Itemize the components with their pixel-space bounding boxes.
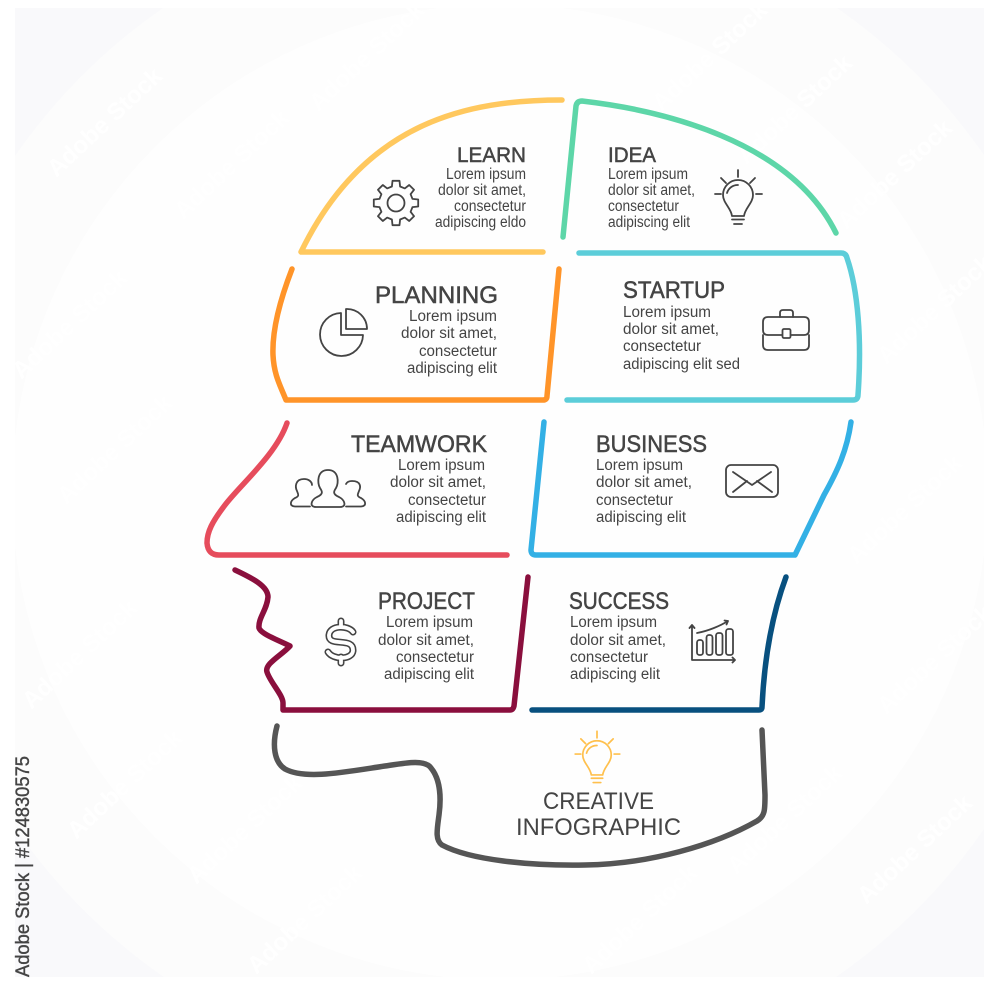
text block: idea: Lorem ipsum xyxy=(608,166,688,183)
text block: teamwork: Lorem ipsum xyxy=(398,457,485,474)
watermarks: Adobe Stock xyxy=(52,389,178,509)
text block: success: Lorem ipsum xyxy=(570,614,657,631)
panel: teamwork xyxy=(207,423,507,555)
heading: teamwork: TEAMWORK xyxy=(351,431,487,458)
outline: learn xyxy=(301,100,562,252)
panel: startup xyxy=(567,253,860,400)
heading: success: SUCCESS xyxy=(569,588,669,615)
text block: learn xyxy=(435,166,526,231)
outline: neck and shoulder xyxy=(274,726,765,865)
text block: startup: adipiscing elit sed xyxy=(623,356,740,373)
text block: idea: adipiscing elit xyxy=(608,214,691,231)
text block: planning: consectetur xyxy=(419,343,497,360)
heading: business: BUSINESS xyxy=(596,431,707,458)
panel: business xyxy=(531,422,851,555)
outline: startup xyxy=(567,253,860,400)
icon: light bulb xyxy=(715,170,762,224)
outline: project xyxy=(235,570,528,710)
text block: idea: consectetur xyxy=(608,198,679,215)
text block: teamwork: consectetur xyxy=(408,492,486,509)
text block: planning: dolor sit amet, xyxy=(401,325,497,342)
watermarks: Adobe Stock xyxy=(42,62,168,182)
text block: success xyxy=(570,614,666,683)
heading: idea: IDEA xyxy=(608,144,656,167)
text block: learn: Lorem ipsum xyxy=(446,166,526,183)
stock credit: Adobe Stock | #124830575 xyxy=(13,756,34,977)
text block: learn: dolor sit amet, xyxy=(438,182,526,199)
text block: business: consectetur xyxy=(596,492,673,509)
text block: learn: consectetur xyxy=(454,198,526,215)
text block: planning: Lorem ipsum xyxy=(409,308,497,325)
watermarks: Adobe Stock xyxy=(577,859,703,979)
icon: dollar xyxy=(328,621,353,663)
watermarks: Adobe Stock xyxy=(17,594,143,714)
watermarks: Adobe Stock xyxy=(852,789,978,909)
outline: business xyxy=(531,422,851,555)
watermarks: Adobe Stock xyxy=(647,0,773,116)
text block: business: dolor sit amet, xyxy=(596,474,692,491)
panel: success xyxy=(532,577,786,710)
icon: gear xyxy=(374,181,418,225)
heading: planning: PLANNING xyxy=(375,282,498,309)
panel: planning xyxy=(273,269,559,400)
watermarks: Adobe Stock xyxy=(842,449,968,569)
outline: success xyxy=(532,577,786,710)
watermarks: Adobe Stock xyxy=(62,724,188,844)
text block: teamwork: adipiscing elit xyxy=(396,509,487,526)
text block: planning: adipiscing elit xyxy=(407,360,498,377)
heading: project: PROJECT xyxy=(378,588,475,615)
panel: idea xyxy=(563,101,836,237)
heading: startup: STARTUP xyxy=(623,277,725,304)
text block: business: Lorem ipsum xyxy=(596,457,683,474)
text block: idea: dolor sit amet, xyxy=(608,182,695,199)
icon: envelope xyxy=(726,465,778,497)
watermarks: Adobe Stock xyxy=(169,104,295,224)
title: creative infographic: INFOGRAPHIC xyxy=(516,814,681,841)
panel: creative infographic xyxy=(274,726,765,865)
text block: project: Lorem ipsum xyxy=(386,614,473,631)
panel: learn xyxy=(301,100,562,252)
text block: business xyxy=(596,457,692,526)
watermarks: Adobe Stock xyxy=(7,264,133,384)
text block: project xyxy=(378,614,475,683)
text block: teamwork xyxy=(390,457,487,526)
watermarks: Adobe Stock xyxy=(872,599,998,719)
icon: yellow light bulb xyxy=(575,731,620,783)
text block: success: consectetur xyxy=(570,649,648,666)
text block: learn: adipiscing eldo xyxy=(435,214,526,231)
text block: idea xyxy=(608,166,695,231)
text block: planning xyxy=(401,308,498,377)
watermarks: Adobe Stock xyxy=(872,249,998,369)
watermarks: Adobe Stock xyxy=(732,49,858,169)
text block: teamwork: dolor sit amet, xyxy=(390,474,486,491)
watermarks: Adobe Stock xyxy=(304,0,430,116)
text block: startup xyxy=(623,304,740,373)
icon: briefcase xyxy=(763,310,809,350)
outline: teamwork xyxy=(207,423,507,555)
heading: learn: LEARN xyxy=(457,144,526,167)
text block: project: consectetur xyxy=(396,649,474,666)
text block: business: adipiscing elit xyxy=(596,509,687,526)
text block: startup: dolor sit amet, xyxy=(623,321,719,338)
title: creative infographic: CREATIVE xyxy=(543,788,654,815)
text block: startup: consectetur xyxy=(623,338,701,355)
title: creative infographic xyxy=(516,788,681,841)
text block: success: adipiscing elit xyxy=(570,666,661,683)
outline: planning xyxy=(273,269,559,400)
text block: project: dolor sit amet, xyxy=(378,632,474,649)
watermarks: Adobe Stock xyxy=(182,769,308,889)
watermarks: Adobe Stock xyxy=(832,114,958,234)
text block: startup: Lorem ipsum xyxy=(623,304,711,321)
outline: idea xyxy=(563,101,836,237)
watermarks: Adobe Stock xyxy=(242,859,368,979)
panel: project xyxy=(235,570,528,710)
watermarks: Adobe Stock xyxy=(722,759,848,879)
icon: growth chart xyxy=(690,620,735,662)
icon: pie chart xyxy=(320,309,367,356)
text block: project: adipiscing elit xyxy=(384,666,475,683)
text block: success: dolor sit amet, xyxy=(570,632,666,649)
icon: people xyxy=(291,470,365,507)
